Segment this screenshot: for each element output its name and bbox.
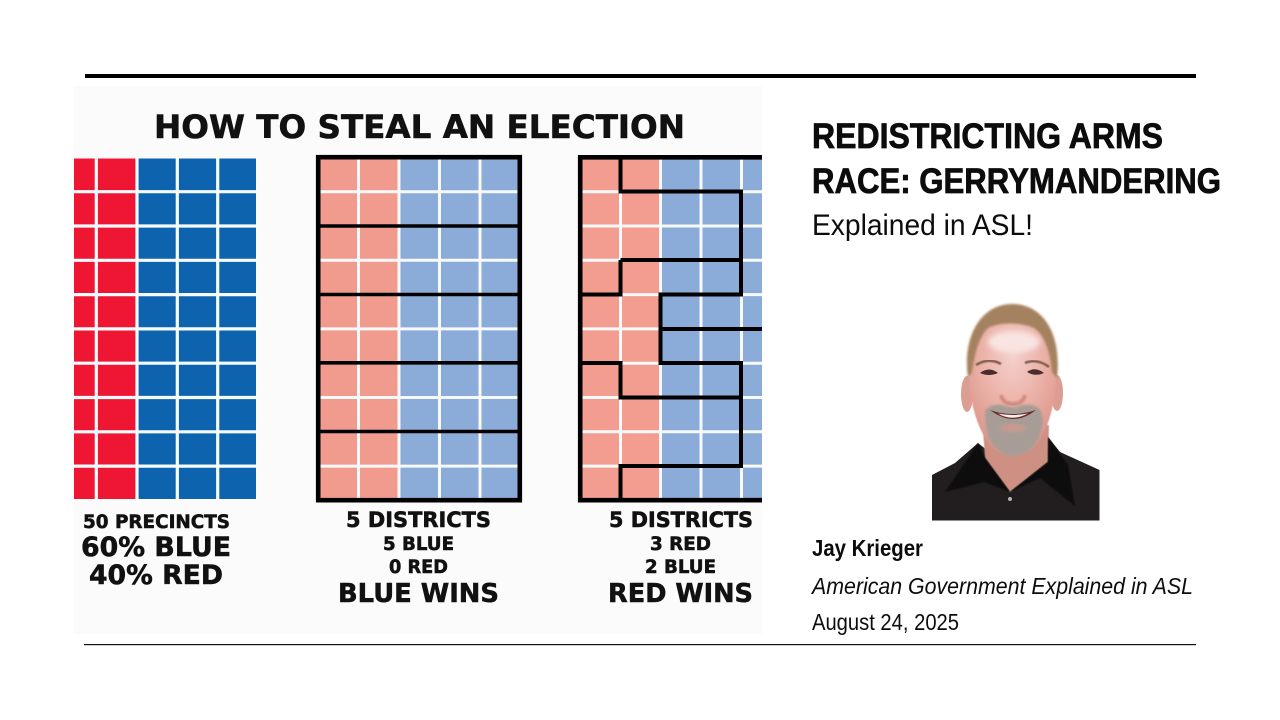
caption: blue wins: 5 BLUE — [383, 533, 454, 555]
smile — [990, 410, 1036, 419]
forehead highlight — [988, 331, 1040, 353]
ears — [961, 376, 973, 412]
face — [969, 318, 1056, 456]
caption: 50 precincts: 60% BLUE — [81, 532, 231, 563]
chin patch — [1000, 424, 1026, 432]
panel: how to steal an election graphic — [74, 86, 762, 634]
bottom rule — [84, 644, 1196, 645]
caption: 50 precincts: 50 PRECINCTS — [83, 512, 230, 533]
collar — [945, 437, 1075, 506]
map: gerrymandered districts, red wins — [579, 157, 762, 500]
shirt — [932, 437, 1100, 520]
caption: blue wins: 5 DISTRICTS — [346, 508, 491, 532]
nose — [1001, 395, 1025, 404]
hair — [967, 304, 1058, 378]
eyebrows — [976, 361, 1049, 367]
series name: American Government Explained in ASL — [810, 573, 1193, 599]
eyes — [980, 369, 1044, 375]
top rule — [85, 74, 1196, 78]
beard — [985, 405, 1043, 456]
graphic heading: HOW TO STEAL AN ELECTION — [154, 108, 685, 146]
portrait of presenter — [932, 304, 1100, 520]
date: August 24, 2025 — [812, 609, 959, 635]
caption: blue wins: BLUE WINS — [338, 579, 499, 609]
caption: red wins: 5 DISTRICTS — [609, 508, 753, 532]
title: REDISTRICTING ARMS — [812, 117, 1163, 156]
grid: 50 precincts — [74, 158, 256, 499]
caption: red wins: RED WINS — [608, 579, 753, 609]
caption: blue wins — [338, 508, 499, 609]
map: fair districts, blue wins — [318, 157, 520, 500]
title: RACE: GERRYMANDERING — [812, 162, 1221, 201]
subtitle: Explained in ASL! — [812, 209, 1033, 242]
caption: 50 precincts: 40% RED — [89, 560, 223, 591]
caption: red wins — [608, 508, 753, 609]
caption: blue wins: 0 RED — [389, 556, 448, 578]
presenter name: Jay Krieger — [812, 535, 923, 561]
caption: 50 precincts — [81, 512, 231, 591]
neck — [983, 425, 1049, 492]
caption: red wins: 3 RED — [650, 533, 711, 555]
shirt button — [1008, 497, 1012, 501]
caption: red wins: 2 BLUE — [645, 556, 716, 578]
title — [812, 117, 1221, 201]
teeth — [998, 414, 1028, 418]
